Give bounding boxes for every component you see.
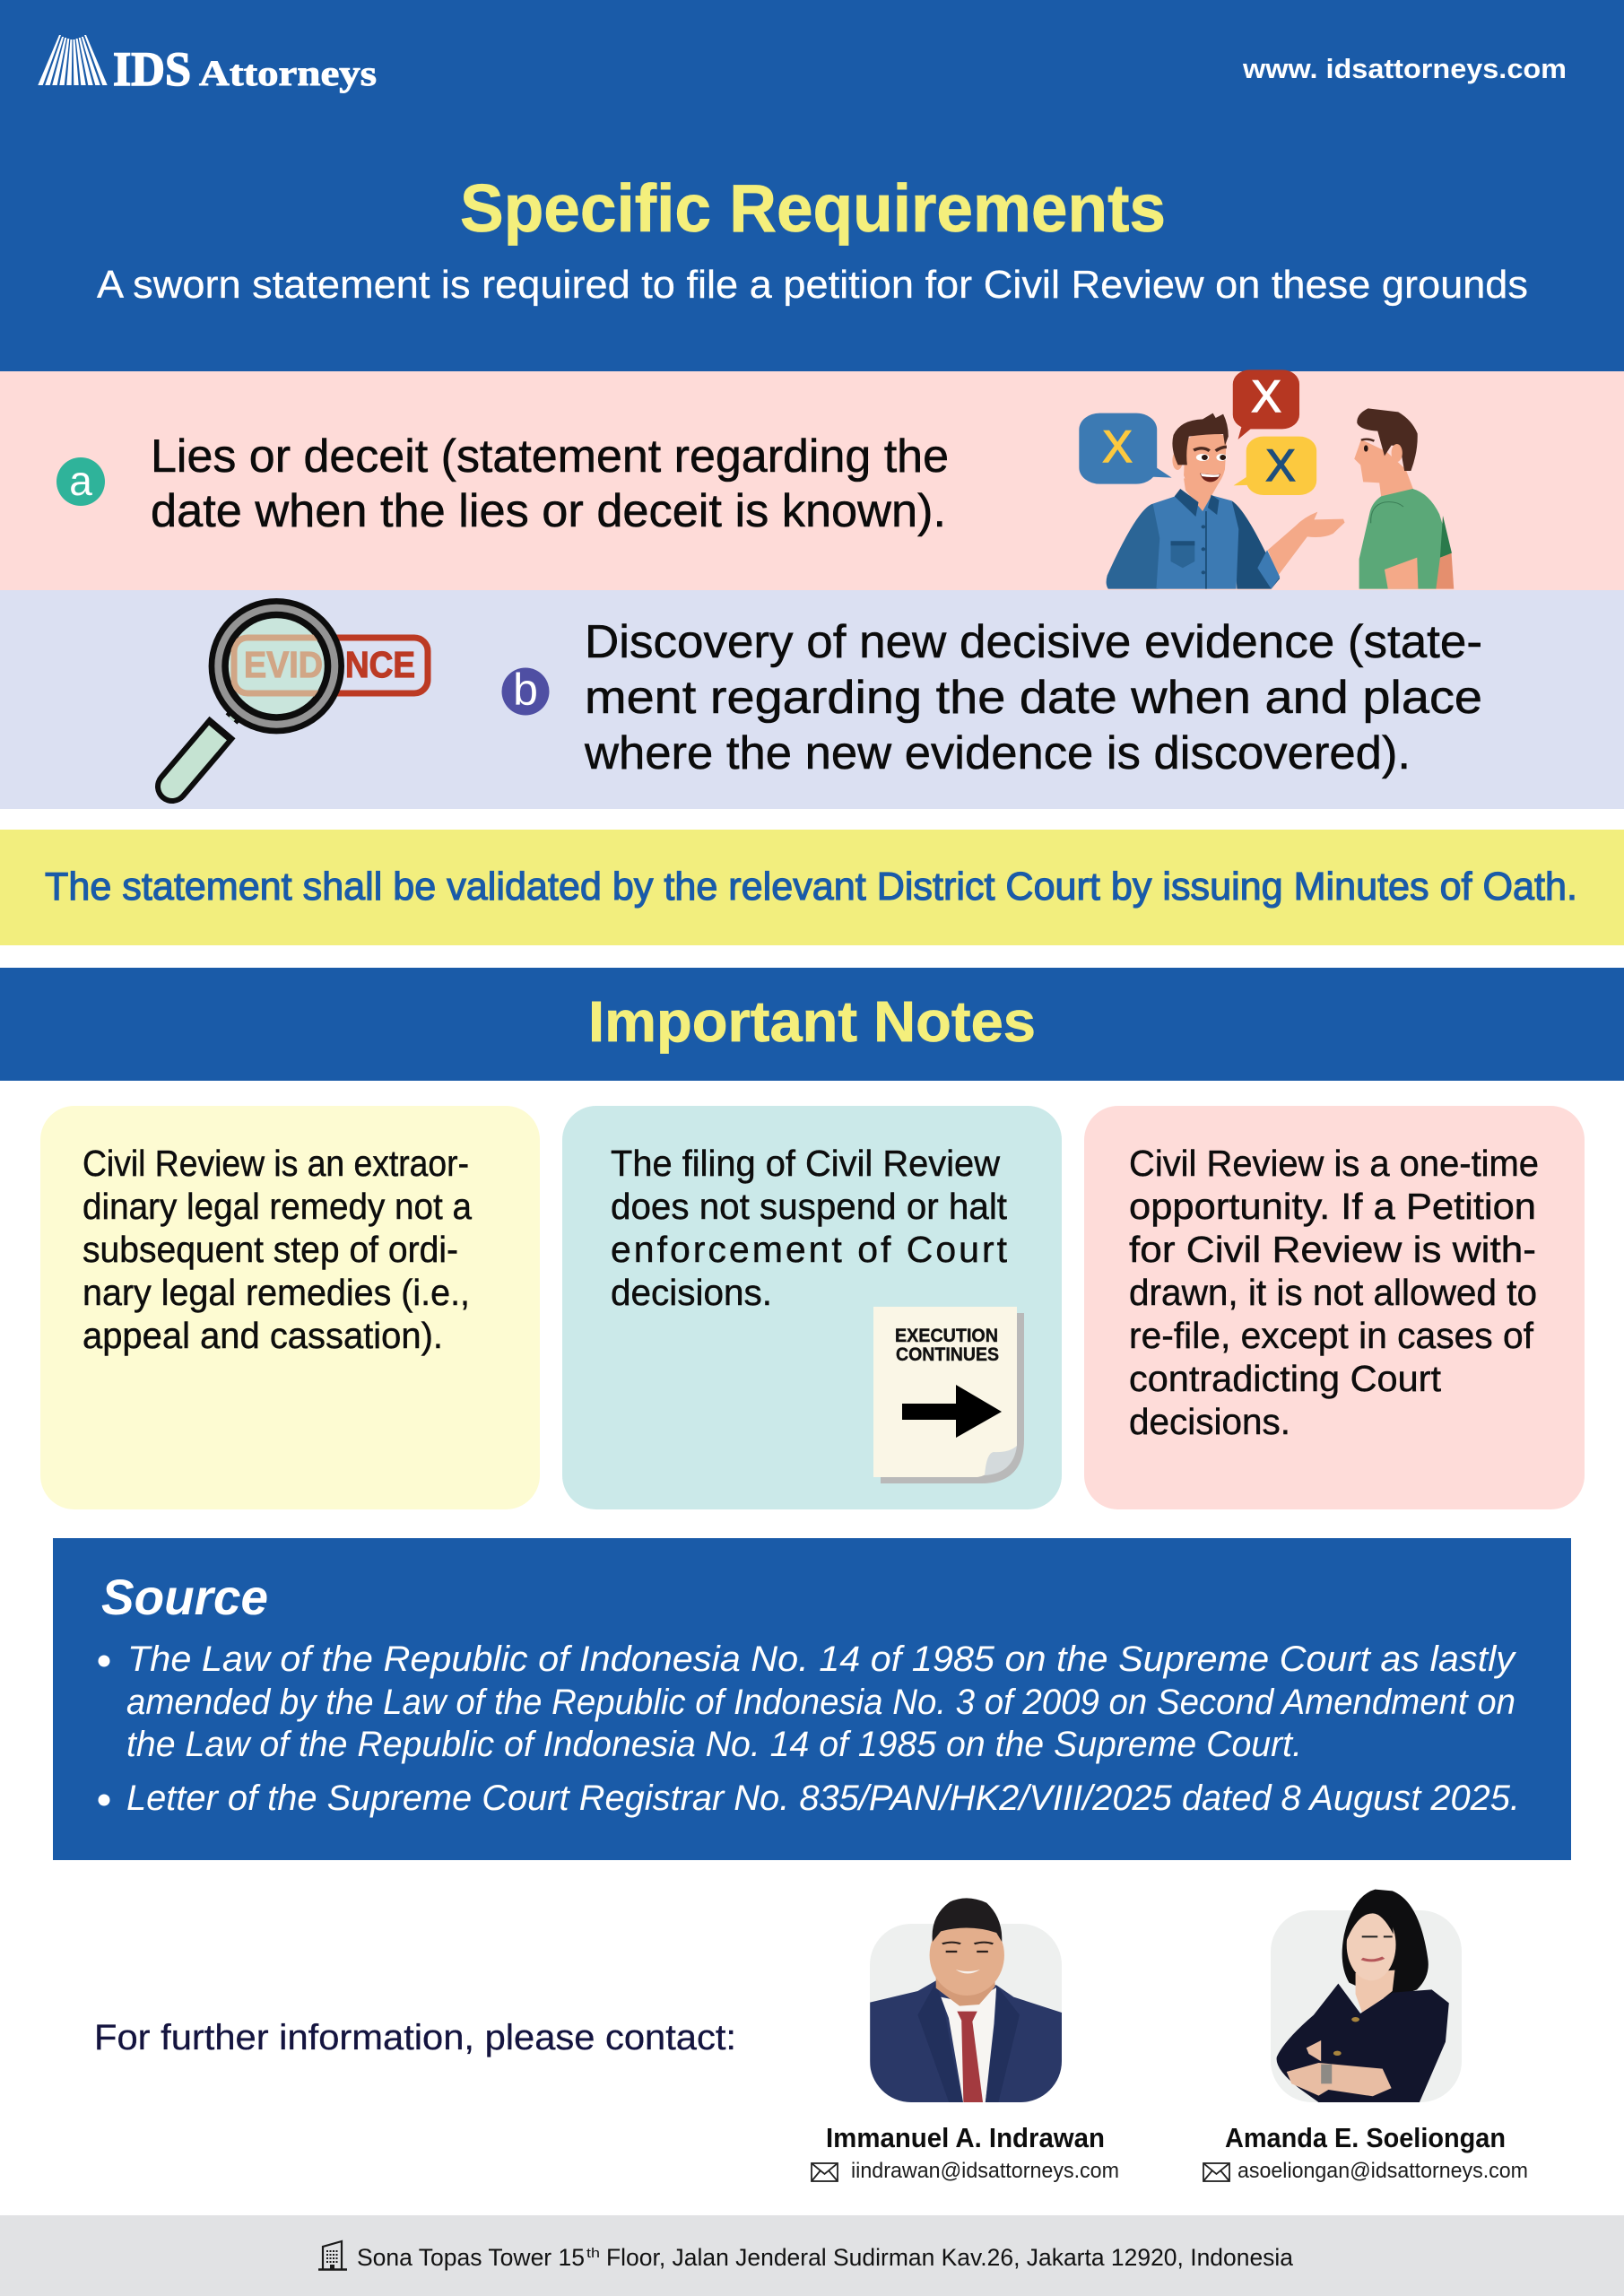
panel: source: amended by the Law of the Republic of Indonesia No. 3 of 2009 on Second Amendment on (126, 1683, 1515, 1722)
icon: magnifying glass over evidence stamp: EVID (244, 644, 323, 685)
icon: magnifying glass over evidence stamp (172, 598, 428, 787)
text: ground a: Lies or deceit (statement regarding the (151, 430, 949, 483)
panel: note 3: for Civil Review is with- (1129, 1229, 1536, 1270)
panel: source: Letter of the Supreme Court Registrar No. 835/PAN/HK2/VIII/2025 dated 8 August 2025. (126, 1779, 1520, 1818)
panel: note 2: The filing of Civil Review (611, 1143, 1000, 1184)
panel: note 3: drawn, it is not allowed to (1129, 1272, 1537, 1313)
callout: minutes of oath: The statement shall be validated by the relevant District Court by issuing Minutes of Oath. (45, 865, 1577, 909)
panel: note 2 (562, 1106, 1062, 1509)
panel: note 3: contradicting Court (1129, 1358, 1442, 1399)
photo: man in navy suit (870, 1898, 1062, 2105)
icon: execution continues document: CONTINUES (896, 1344, 999, 1365)
panel: note 1 (40, 1106, 540, 1509)
email: iindrawan@idsattorneys.com (851, 2159, 1119, 2183)
badge a (56, 457, 105, 506)
heading: important notes (0, 968, 1624, 1081)
panel: note 1: subsequent step of ordi- (83, 1229, 458, 1270)
icon: red speech bubble (1233, 370, 1299, 439)
text: contact prompt: For further information, please contact: (94, 2018, 736, 2057)
icon: execution continues document: EXECUTION (895, 1326, 998, 1346)
illustration: two men talking with speech bubbles: X (1102, 422, 1133, 472)
badge b (502, 665, 549, 716)
name: Immanuel A. Indrawan (826, 2122, 1105, 2153)
panel: ground a lies or deceit (0, 370, 1624, 590)
panel: note 3: re-file, except in cases of (1129, 1315, 1534, 1356)
heading: important notes: Important Notes (588, 989, 1036, 1054)
text: address: Sona Topas Tower 15 (357, 2244, 585, 2271)
illustration: two men talking with speech bubbles (1079, 370, 1454, 589)
icon: logo building stripes (38, 35, 108, 85)
panel: note 2: does not suspend or halt (611, 1186, 1008, 1227)
panel: note 2: decisions. (611, 1272, 772, 1313)
illustration: two men talking with speech bubbles: X (1251, 371, 1281, 422)
panel: note 1: nary legal remedies (i.e., (83, 1272, 470, 1313)
panel: source (53, 1538, 1571, 1860)
badge b: b (513, 665, 538, 715)
icon: office building (318, 2241, 347, 2269)
email: asoeliongan@idsattorneys.com (1238, 2159, 1528, 2183)
icon: execution continues document (873, 1307, 1024, 1483)
logo: IDS Attorneys: Attorneys (199, 53, 377, 93)
panel: footer address (0, 2215, 1624, 2296)
website url: www. idsattorneys.com (1242, 53, 1567, 84)
arrow (902, 1385, 1002, 1438)
text: ground b (584, 616, 1482, 779)
text: ground b: where the new evidence is discovered). (584, 727, 1411, 779)
icon: envelope (812, 2163, 838, 2181)
callout: minutes of oath (0, 830, 1624, 945)
panel: note 2: enforcement of Court (611, 1229, 1008, 1270)
panel: source: the Law of the Republic of Indonesia No. 14 of 1985 on the Supreme Court. (126, 1725, 1302, 1764)
text: ground a (151, 430, 949, 537)
panel: source: The Law of the Republic of Indonesia No. 14 of 1985 on the Supreme Court as lastly (127, 1639, 1517, 1679)
figure: man in green shirt (1354, 408, 1454, 589)
panel: note 1: appeal and cassation). (83, 1315, 443, 1356)
icon: magnifying glass over evidence stamp: NCE (345, 644, 415, 685)
contact: Amanda E. Soeliongan (1203, 1890, 1528, 2183)
panel: note 3: opportunity. If a Petition (1129, 1186, 1536, 1227)
panel: note 3 (1084, 1106, 1585, 1509)
text: address: th (586, 2246, 600, 2261)
panel: note 1: Civil Review is an extraor- (83, 1143, 469, 1184)
figure: man in blue shirt (1107, 413, 1345, 589)
title: Specific Requirements (460, 170, 1166, 246)
illustration: two men talking with speech bubbles: X (1265, 440, 1296, 491)
text: ground a: date when the lies or deceit is known). (151, 485, 946, 537)
text: ground b: Discovery of new decisive evidence (state- (585, 616, 1482, 668)
panel: ground b new evidence (0, 590, 1624, 809)
icon: yellow speech bubble (1234, 437, 1316, 495)
panel: note 3: decisions. (1129, 1401, 1290, 1442)
text: ground b: ment regarding the date when and place (585, 672, 1482, 724)
photo: woman in dark jacket (1271, 1890, 1462, 2102)
contact: Immanuel A. Indrawan (812, 1898, 1119, 2183)
heading: source: Source (101, 1569, 268, 1625)
panel: note 3: Civil Review is a one-time (1129, 1143, 1539, 1184)
panel: note 1: dinary legal remedy not a (83, 1186, 472, 1227)
icon: blue speech bubble (1079, 413, 1172, 484)
panel: header (0, 0, 1624, 371)
icon: envelope (1203, 2163, 1229, 2181)
text: address: Floor, Jalan Jenderal Sudirman Kav.26, Jakarta 12920, Indonesia (606, 2244, 1294, 2271)
logo: IDS Attorneys (38, 35, 377, 96)
logo: IDS Attorneys: IDS (113, 42, 191, 96)
badge a: a (69, 457, 92, 504)
subtitle: A sworn statement is required to file a petition for Civil Review on these grounds (97, 263, 1528, 307)
name: Amanda E. Soeliongan (1225, 2122, 1506, 2153)
